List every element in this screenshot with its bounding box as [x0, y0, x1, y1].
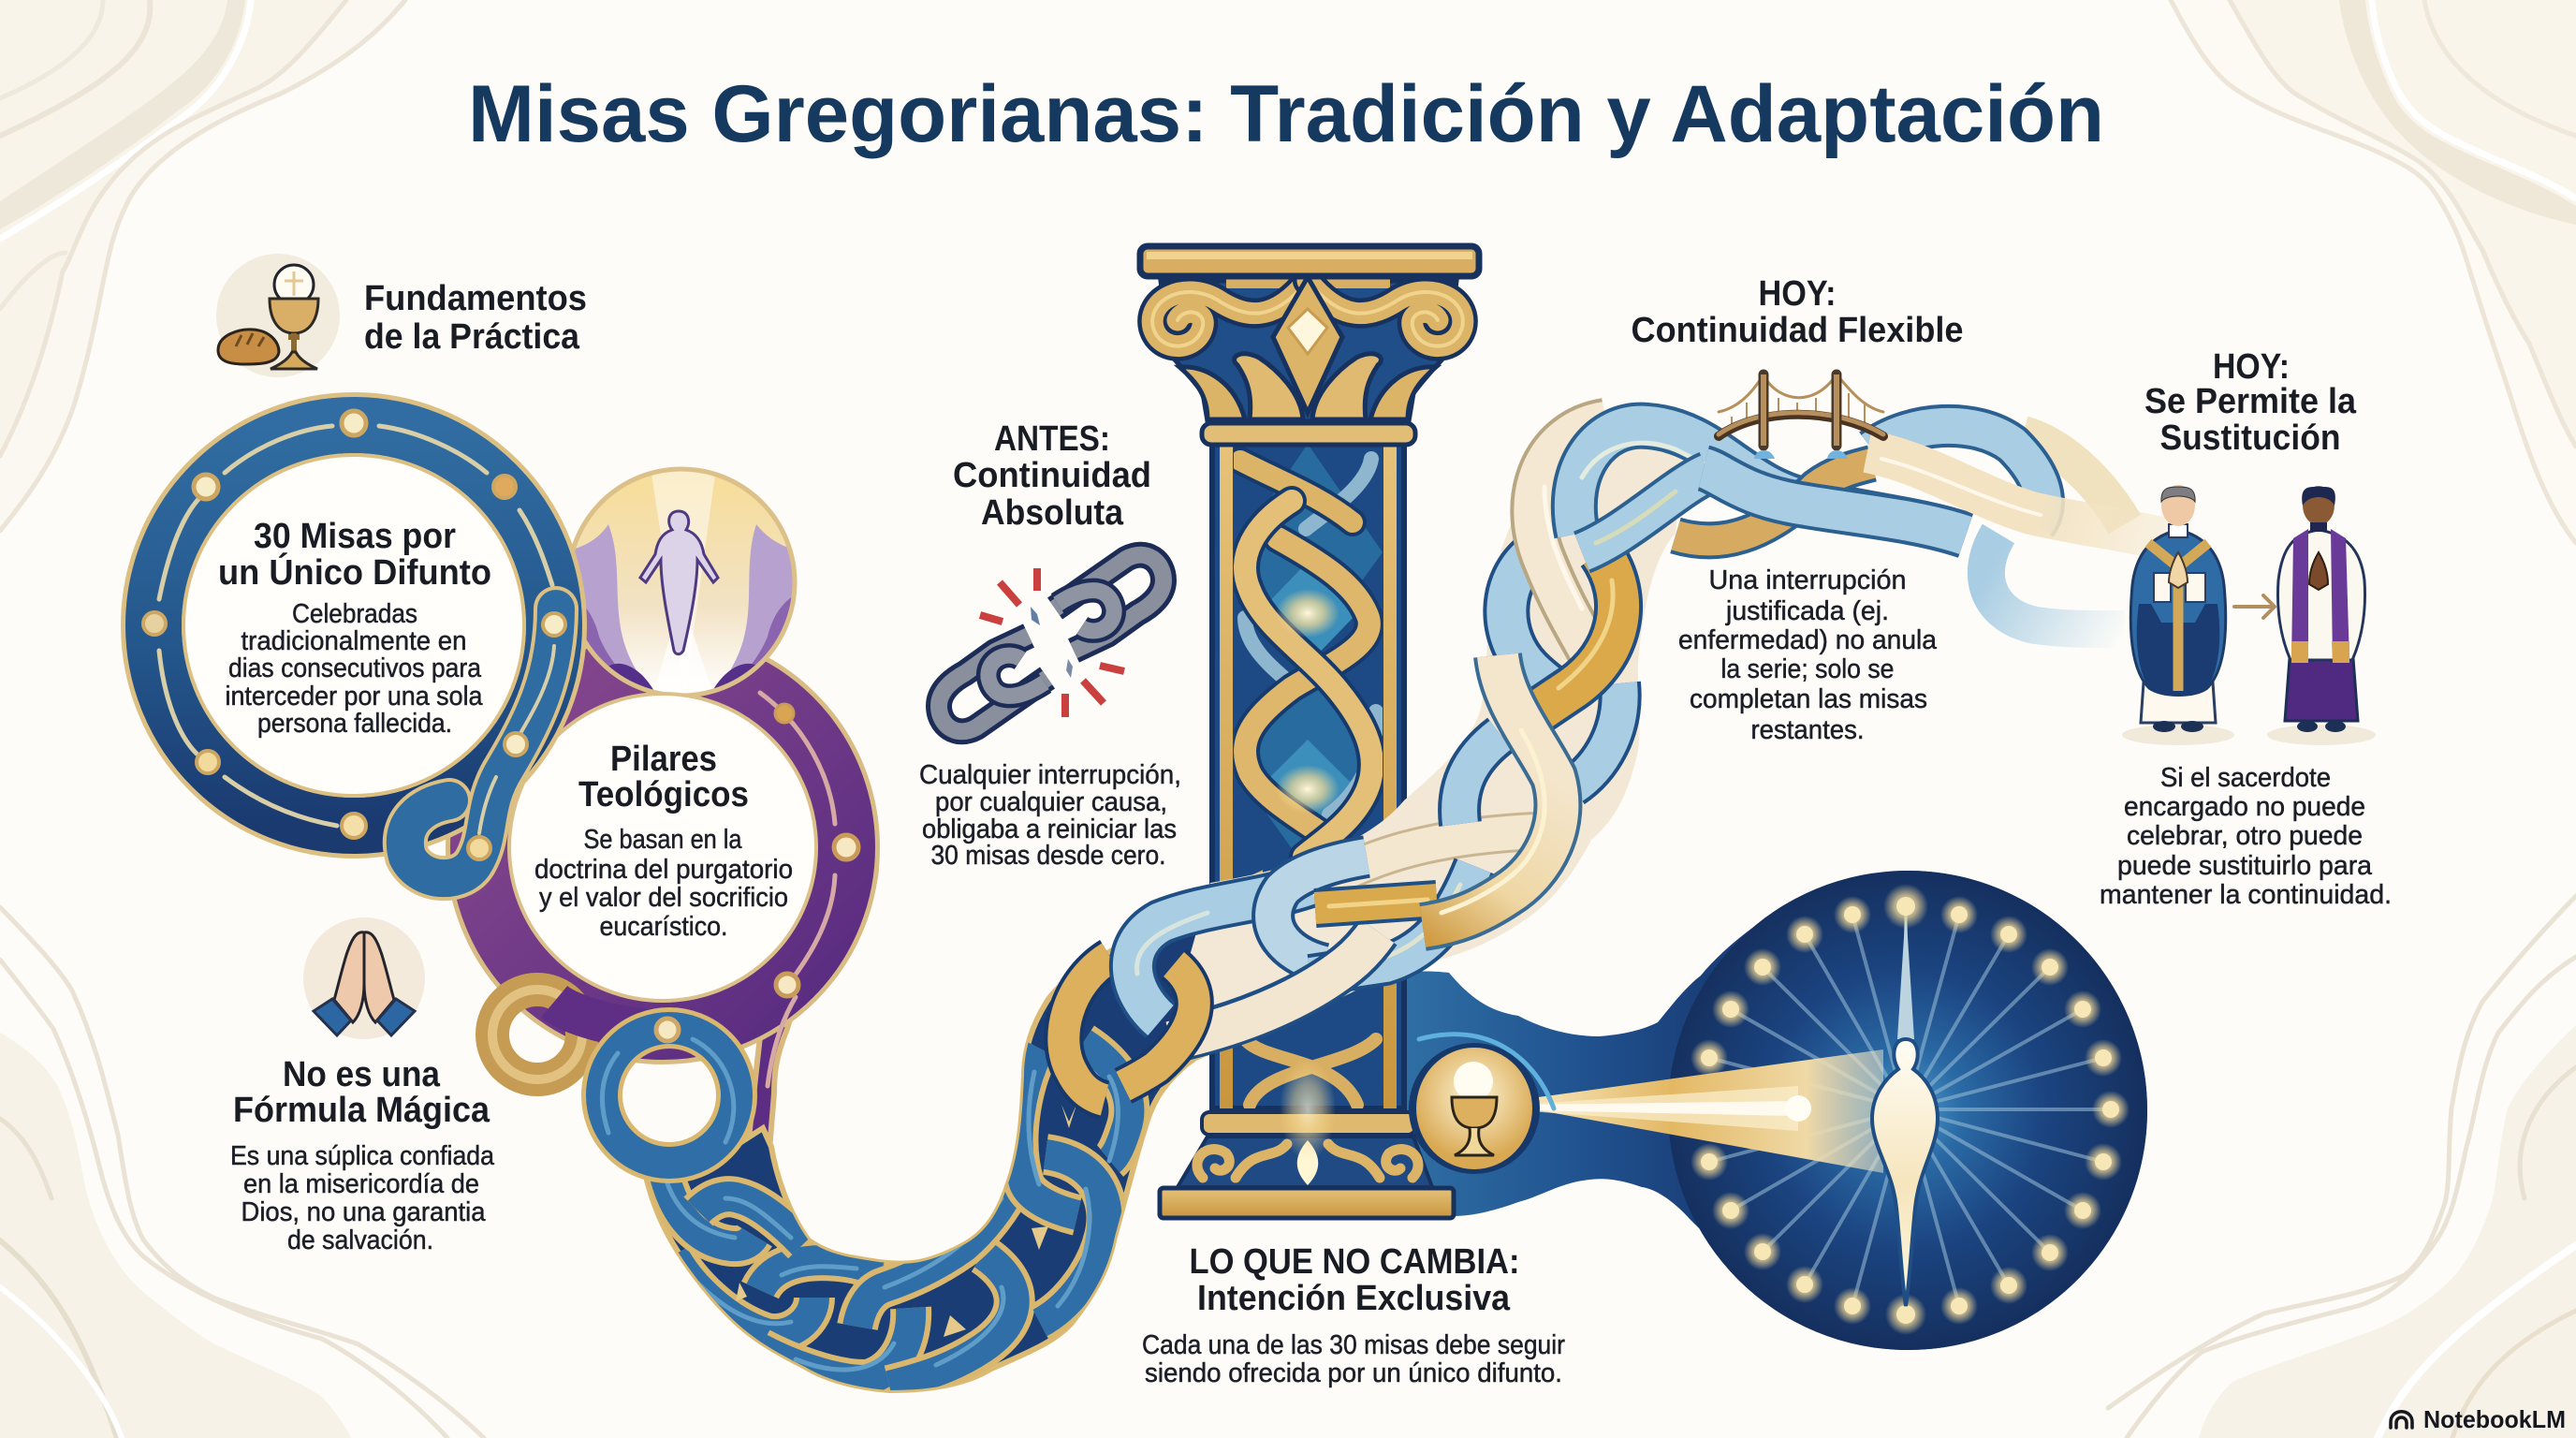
text: lo que no cambia body — [1142, 1330, 1565, 1388]
gold link left — [1063, 957, 1110, 1100]
heading: Fundamentos — [364, 279, 587, 357]
heading: lo que no cambia — [1189, 1242, 1520, 1318]
text: hoy sustitucion body: encargado no puede — [2124, 792, 2365, 822]
gold ring link — [492, 990, 655, 1079]
text: pilares body — [534, 825, 793, 942]
heading: lo que no cambia: Intención Exclusiva — [1197, 1279, 1511, 1318]
braided chain: dark links — [642, 874, 1260, 1390]
pillar capital — [1161, 281, 1456, 421]
text: 30 misas body: dias consecutivos para — [228, 653, 482, 683]
rays — [1709, 906, 2111, 1314]
blue ring tail — [405, 609, 556, 878]
figure — [1872, 1039, 1938, 1306]
text: antes body — [919, 760, 1181, 871]
text: hoy sustitucion body — [2100, 763, 2392, 910]
heading: hoy sustitucion: Sustitución — [2160, 418, 2340, 458]
heading: Pilares Teológicos: Pilares — [610, 740, 717, 779]
heading: No es una Fórmula Mágica: No es una — [283, 1055, 441, 1094]
chain base — [642, 874, 1260, 1390]
icon: praying hands — [303, 917, 425, 1039]
text: hoy continuidad body: la serie; solo se — [1720, 654, 1895, 684]
upper blue loop — [1872, 426, 2043, 524]
halo behind the braid — [1161, 417, 1685, 1059]
blue left bend — [1506, 552, 1563, 697]
icon: chalice and bread — [216, 254, 340, 377]
heading: 30 Misas por un Único Difunto — [218, 517, 491, 593]
cream strand upper — [1533, 421, 1605, 655]
heading: hoy sustitucion — [2144, 347, 2357, 458]
heading: lo que no cambia: LO QUE NO CAMBIA: — [1189, 1242, 1520, 1282]
text: no es formula body: Dios, no una garantia — [242, 1197, 486, 1227]
text: hoy continuidad body: justificada (ej. — [1725, 596, 1889, 626]
text: hoy sustitucion body: puede sustituirlo para — [2117, 851, 2373, 881]
text: no es formula body: Es una súplica confiada — [230, 1141, 495, 1171]
title: Misas Gregorianas: Tradición y Adaptación — [468, 69, 2104, 159]
text: pilares body: doctrina del purgatorio — [534, 855, 793, 885]
upper cream strand — [1310, 831, 1535, 889]
light blue strand — [1133, 885, 1310, 1020]
heading: antes: ANTES: — [994, 419, 1110, 459]
gold bar — [1315, 900, 1437, 908]
text: no es formula body: de salvación. — [287, 1225, 433, 1255]
text: 30 misas body: interceder por una sola — [225, 682, 483, 712]
text: hoy sustitucion body: mantener la continuidad. — [2100, 880, 2392, 910]
heading: 30 Misas por un Único Difunto: 30 Misas por — [254, 517, 456, 556]
heading: No es una Fórmula Mágica — [233, 1055, 490, 1130]
heading: Pilares Teológicos: Teológicos — [578, 775, 749, 814]
blue peninsula and disc of 30 masses — [1385, 871, 2147, 1350]
text: 30 misas body: tradicionalmente en — [242, 626, 466, 656]
notebooklm watermark: NotebookLM — [2423, 1405, 2566, 1433]
heading: Fundamentos: Fundamentos — [364, 279, 587, 318]
blue straight band — [1582, 473, 1708, 552]
heading: hoy continuidad: HOY: — [1758, 274, 1837, 314]
text: antes body: por cualquier causa, — [935, 787, 1167, 817]
text: 30 misas body: Celebradas — [292, 599, 417, 629]
lower blue strand — [1310, 866, 1474, 976]
text: antes body: 30 misas desde cero. — [930, 841, 1166, 871]
pillar abacus — [1140, 246, 1479, 276]
blue C loop — [1273, 857, 1367, 964]
heading: antes: Absoluta — [981, 493, 1124, 533]
small blue ring link — [602, 1019, 737, 1163]
studs — [1690, 884, 2130, 1335]
icon: broken chain — [939, 555, 1164, 731]
gold back strand — [1676, 463, 1872, 540]
icon: priest in purple stole — [2267, 486, 2376, 745]
text: hoy continuidad body: completan las misas — [1690, 684, 1927, 714]
text: no es formula body — [230, 1141, 495, 1255]
heading: antes — [953, 419, 1151, 533]
right blue arc — [1573, 683, 1620, 786]
heading: Fundamentos: de la Práctica — [364, 317, 580, 357]
pillar necking — [1202, 423, 1415, 445]
left blue arc — [1459, 735, 1500, 824]
text: antes body: obligaba a reiniciar las — [922, 814, 1177, 844]
cream fading strand — [1867, 451, 2172, 541]
lower fading blue loop — [1986, 534, 2125, 629]
icon: priest in blue chasuble — [2122, 485, 2234, 745]
text: pilares body: y el valor del socrificio — [539, 883, 788, 913]
chain links — [659, 1043, 1129, 1386]
purple ring tail — [749, 866, 876, 1161]
heading: hoy continuidad: Continuidad Flexible — [1631, 311, 1964, 350]
heading: antes: Continuidad — [953, 456, 1151, 495]
text: lo que no cambia body: siendo ofrecida por un único difunto. — [1145, 1358, 1562, 1388]
text: lo que no cambia body: Cada una de las 30 misas debe seguir — [1142, 1330, 1565, 1360]
text: hoy continuidad body: Una interrupción — [1709, 565, 1906, 595]
pale gold back loop — [2023, 434, 2125, 524]
gold strand — [1535, 552, 1618, 713]
panel: 30 misas ring — [143, 411, 565, 878]
arrow: substitution — [2234, 595, 2275, 618]
inner white disc: pilares — [509, 694, 816, 1001]
heading: hoy sustitucion: Se Permite la — [2144, 382, 2357, 421]
braid: woven ribbons rising to the right — [1063, 417, 2172, 1100]
gold link right — [1123, 964, 1194, 1086]
text: antes body: Cualquier interrupción, — [919, 760, 1181, 790]
text: hoy continuidad body: enfermedad) no anula — [1678, 625, 1938, 655]
chalice medallion — [1409, 1034, 1554, 1174]
lower cream strand — [1184, 932, 1378, 1037]
heading: Pilares Teológicos — [578, 740, 749, 814]
text: pilares body: Se basan en la — [584, 825, 742, 855]
cream to gold strand — [1423, 655, 1558, 927]
text: 30 misas body: persona fallecida. — [257, 709, 452, 739]
text: pilares body: eucarístico. — [599, 912, 728, 942]
heading: hoy continuidad — [1631, 274, 1964, 350]
blue strand over top — [1574, 426, 1966, 536]
icon: bridge — [1719, 374, 1883, 459]
pillar — [1140, 246, 1479, 1218]
text: hoy continuidad body — [1678, 565, 1938, 745]
text: 30 misas body — [225, 599, 483, 739]
beam of intention — [1498, 1049, 1883, 1173]
icon: purgatory orb — [573, 466, 798, 697]
heading: hoy sustitucion: HOY: — [2213, 347, 2290, 387]
panel: pilares ring — [479, 664, 876, 1161]
text: hoy continuidad body: restantes. — [1750, 715, 1865, 745]
text: hoy sustitucion body: Si el sacerdote — [2160, 763, 2331, 793]
pillar base — [1202, 1112, 1415, 1135]
heading: 30 Misas por un Único Difunto: un Único Difunto — [218, 551, 491, 593]
pillar shaft — [1212, 444, 1404, 1108]
text: no es formula body: en la misericordía de — [243, 1169, 479, 1199]
heading: No es una Fórmula Mágica: Fórmula Mágica — [233, 1091, 490, 1130]
text: hoy sustitucion body: celebrar, otro puede — [2127, 821, 2363, 851]
